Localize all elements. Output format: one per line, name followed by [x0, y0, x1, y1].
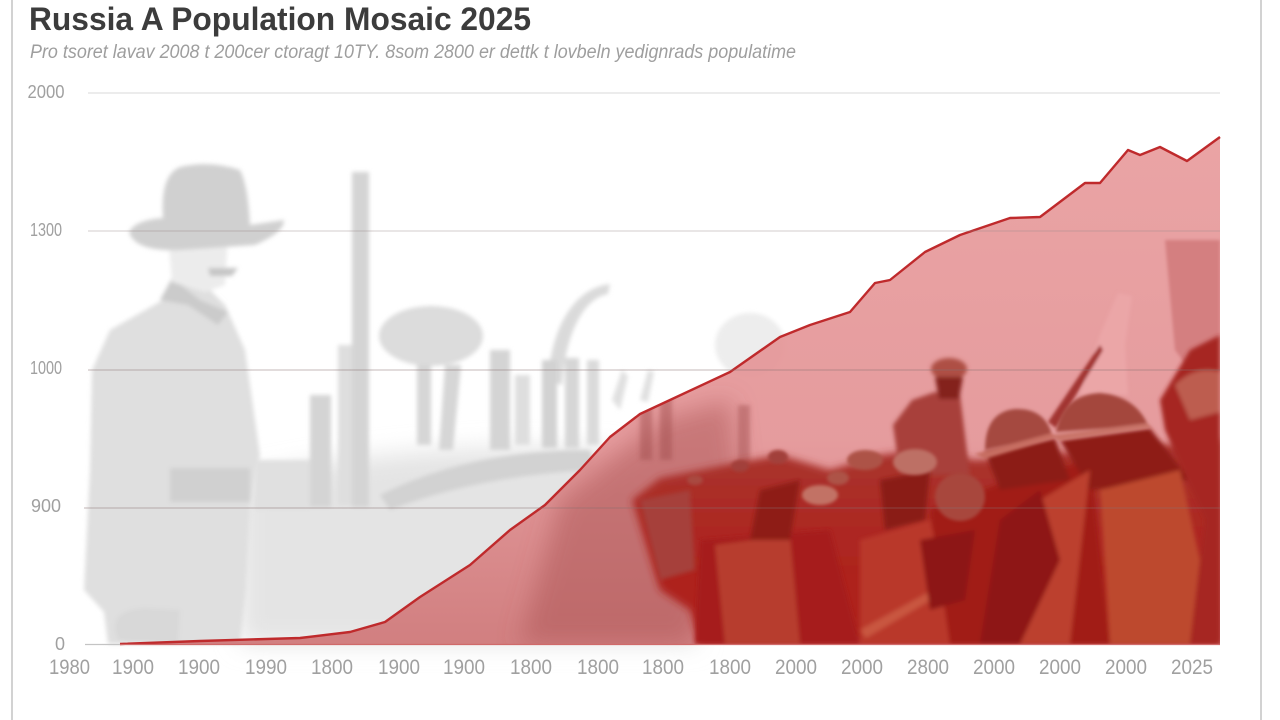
x axis labels: 1800 [642, 656, 684, 679]
helmets [687, 393, 1151, 521]
factory showing through red [638, 400, 752, 462]
x axis labels: 1900 [178, 656, 220, 679]
y axis labels: 2000 [28, 82, 64, 102]
subtitle: Pro tsoret lavav 2008 t 200cer ctoragt 10TY. 8som 2800 er dettk t lovbeln yedignrads populatime [30, 42, 796, 63]
title: Russia A Population Mosaic 2025 [29, 1, 531, 37]
y axis labels: 1000 [30, 358, 62, 378]
x axis labels: 1900 [443, 656, 485, 679]
background photo: factory skyline [240, 172, 785, 644]
soldiers photo in red duotone [520, 240, 1220, 644]
x axis labels: 1900 [378, 656, 420, 679]
x axis labels: 1800 [577, 656, 619, 679]
y axis labels [28, 82, 65, 654]
x axis labels: 2000 [1039, 656, 1081, 679]
x axis labels: 2000 [973, 656, 1015, 679]
x axis labels: 1900 [112, 656, 154, 679]
x axis labels: 1990 [245, 656, 287, 679]
gridlines [84, 93, 1220, 644]
y axis labels: 900 [31, 496, 61, 516]
population area [120, 137, 1220, 644]
x axis labels: 2025 [1171, 656, 1213, 679]
x axis labels: 1800 [709, 656, 751, 679]
x axis labels: 2000 [775, 656, 817, 679]
x axis labels: 1800 [311, 656, 353, 679]
background photo: man in hat [84, 164, 284, 644]
x axis labels: 1980 [49, 656, 90, 679]
x axis labels [49, 656, 1213, 679]
darker left-hand terrain [520, 400, 740, 644]
distant crowd [632, 440, 1220, 644]
foreground soldiers [640, 335, 1220, 644]
x axis labels: 2000 [1105, 656, 1147, 679]
y axis labels: 1300 [30, 220, 62, 240]
x axis labels: 2800 [907, 656, 949, 679]
y axis labels: 0 [55, 634, 65, 654]
x axis labels: 2000 [841, 656, 883, 679]
population line [120, 137, 1220, 644]
pale flags [1048, 240, 1220, 428]
soldier with backpack [893, 358, 970, 475]
x axis labels: 1800 [510, 656, 552, 679]
